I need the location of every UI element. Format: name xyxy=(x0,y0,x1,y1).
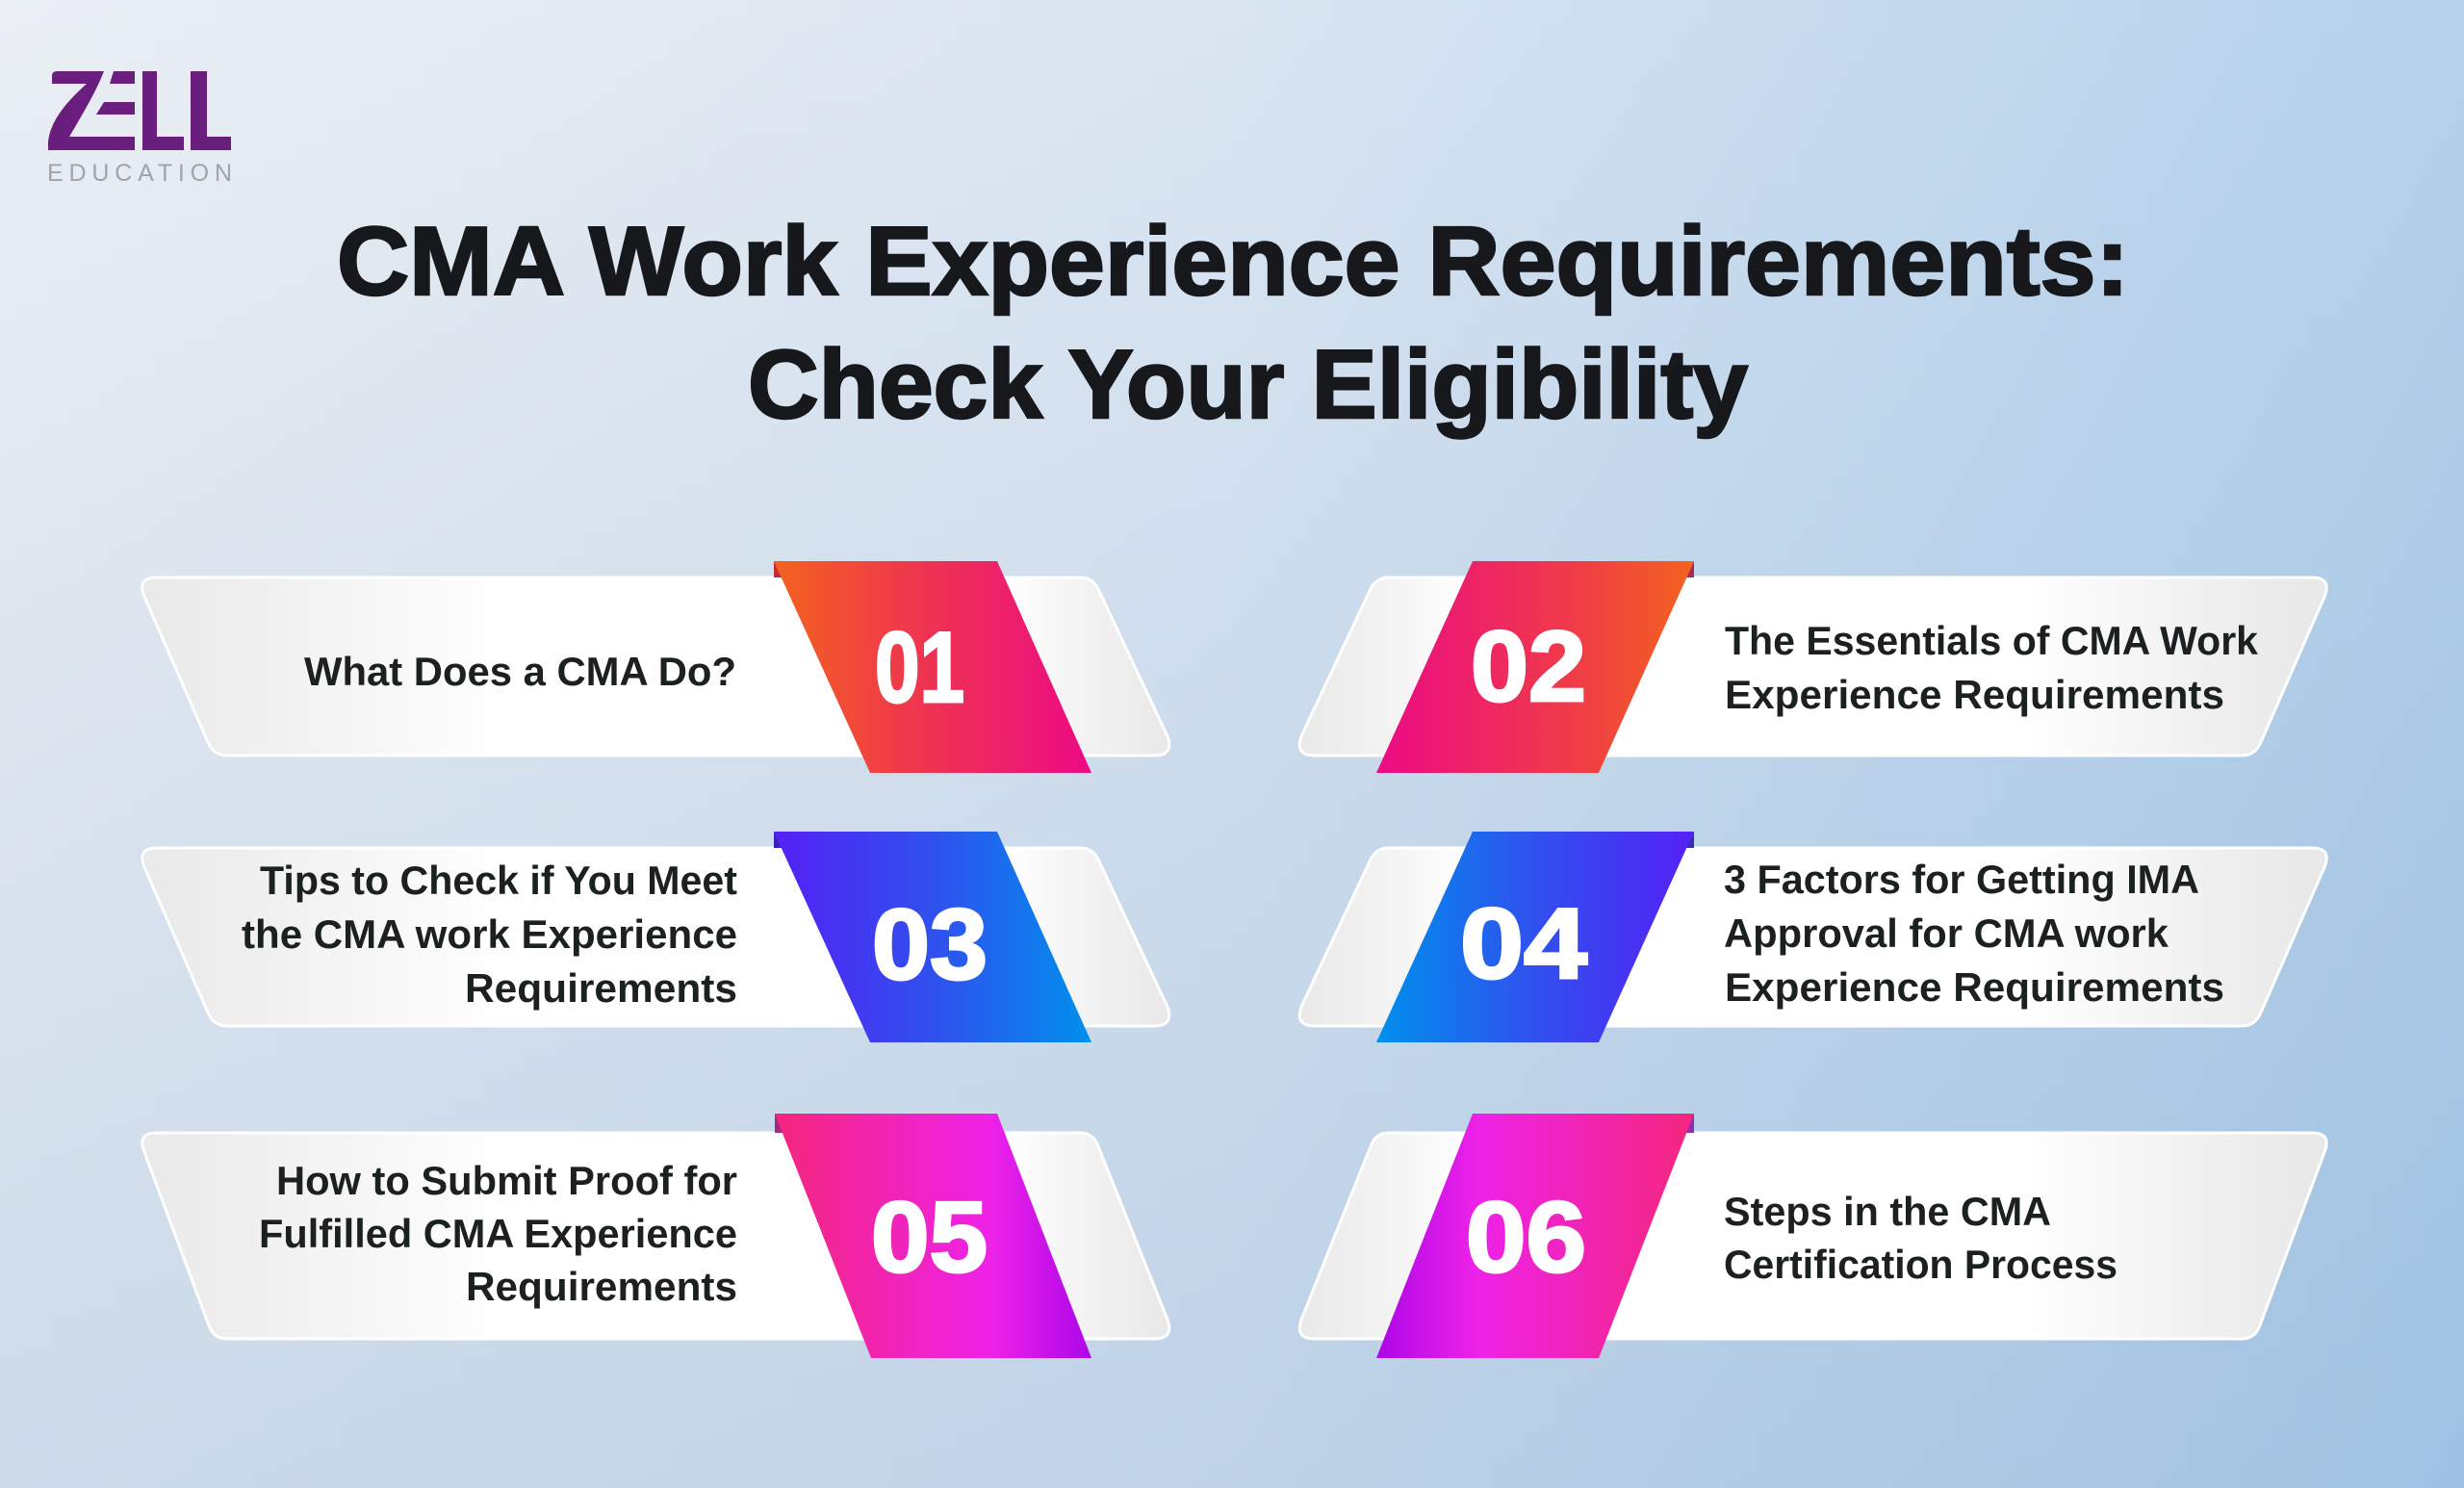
badge 05 xyxy=(775,1114,1091,1358)
label 01: What Does a CMA Do? xyxy=(304,649,736,694)
card 02 xyxy=(1299,577,2326,756)
number 02: 02 xyxy=(1471,611,1586,723)
label 02: Experience Requirements xyxy=(1725,672,2224,717)
label 03: the CMA work Experience xyxy=(242,911,737,957)
label 02 xyxy=(1725,618,2259,717)
badge 03 xyxy=(774,832,1091,1042)
card 05 xyxy=(142,1133,1169,1339)
logo: Zell Education xyxy=(47,71,232,187)
card 03 xyxy=(142,848,1169,1026)
panel: item 02 xyxy=(1299,561,2326,773)
title: CMA Work Experience Requirements: xyxy=(337,208,2129,316)
label 03: Tips to Check if You Meet xyxy=(260,858,737,903)
label 05 xyxy=(259,1158,737,1309)
title xyxy=(337,208,2129,439)
badge 02 xyxy=(1376,561,1694,773)
label 04: Approval for CMA work xyxy=(1724,911,2169,956)
card 04 xyxy=(1299,848,2326,1026)
badge 06 xyxy=(1376,1114,1694,1358)
card 01 xyxy=(142,577,1169,756)
fold 04 xyxy=(1686,832,1694,848)
fold 01 xyxy=(774,561,782,577)
panel: item 01 xyxy=(142,561,1169,773)
label 02: The Essentials of CMA Work xyxy=(1725,618,2259,663)
fold 02 xyxy=(1686,561,1694,577)
number 03: 03 xyxy=(872,889,988,1001)
label 03 xyxy=(242,858,737,1011)
label 05: Requirements xyxy=(466,1264,737,1309)
label 06: Certification Process xyxy=(1724,1242,2118,1287)
badge 01 xyxy=(774,561,1091,773)
number 01: 01 xyxy=(875,612,964,724)
fold 06 xyxy=(1685,1114,1694,1133)
fold 03 xyxy=(774,832,782,848)
panel: item 06 xyxy=(1299,1114,2326,1358)
label 04: 3 Factors for Getting IMA xyxy=(1724,857,2199,902)
fold 05 xyxy=(775,1114,783,1133)
label 05: Fulfilled CMA Experience xyxy=(259,1211,737,1256)
panel: item 05 xyxy=(142,1114,1169,1358)
label 04: Experience Requirements xyxy=(1725,964,2224,1010)
panel: item 03 xyxy=(142,832,1169,1042)
label 05: How to Submit Proof for xyxy=(276,1158,737,1203)
card 06 xyxy=(1299,1133,2326,1339)
number 05: 05 xyxy=(871,1182,988,1294)
badge 04 xyxy=(1376,832,1694,1042)
panel: item 04 xyxy=(1299,832,2326,1042)
title: Check Your Eligibility xyxy=(748,331,1748,439)
label 04 xyxy=(1724,857,2224,1010)
label 03: Requirements xyxy=(465,965,737,1011)
number 04: 04 xyxy=(1460,888,1587,1000)
number 06: 06 xyxy=(1466,1182,1586,1294)
logo: Zell Education: EDUCATION xyxy=(47,160,232,187)
label 06 xyxy=(1724,1189,2118,1287)
label 06: Steps in the CMA xyxy=(1724,1189,2051,1234)
